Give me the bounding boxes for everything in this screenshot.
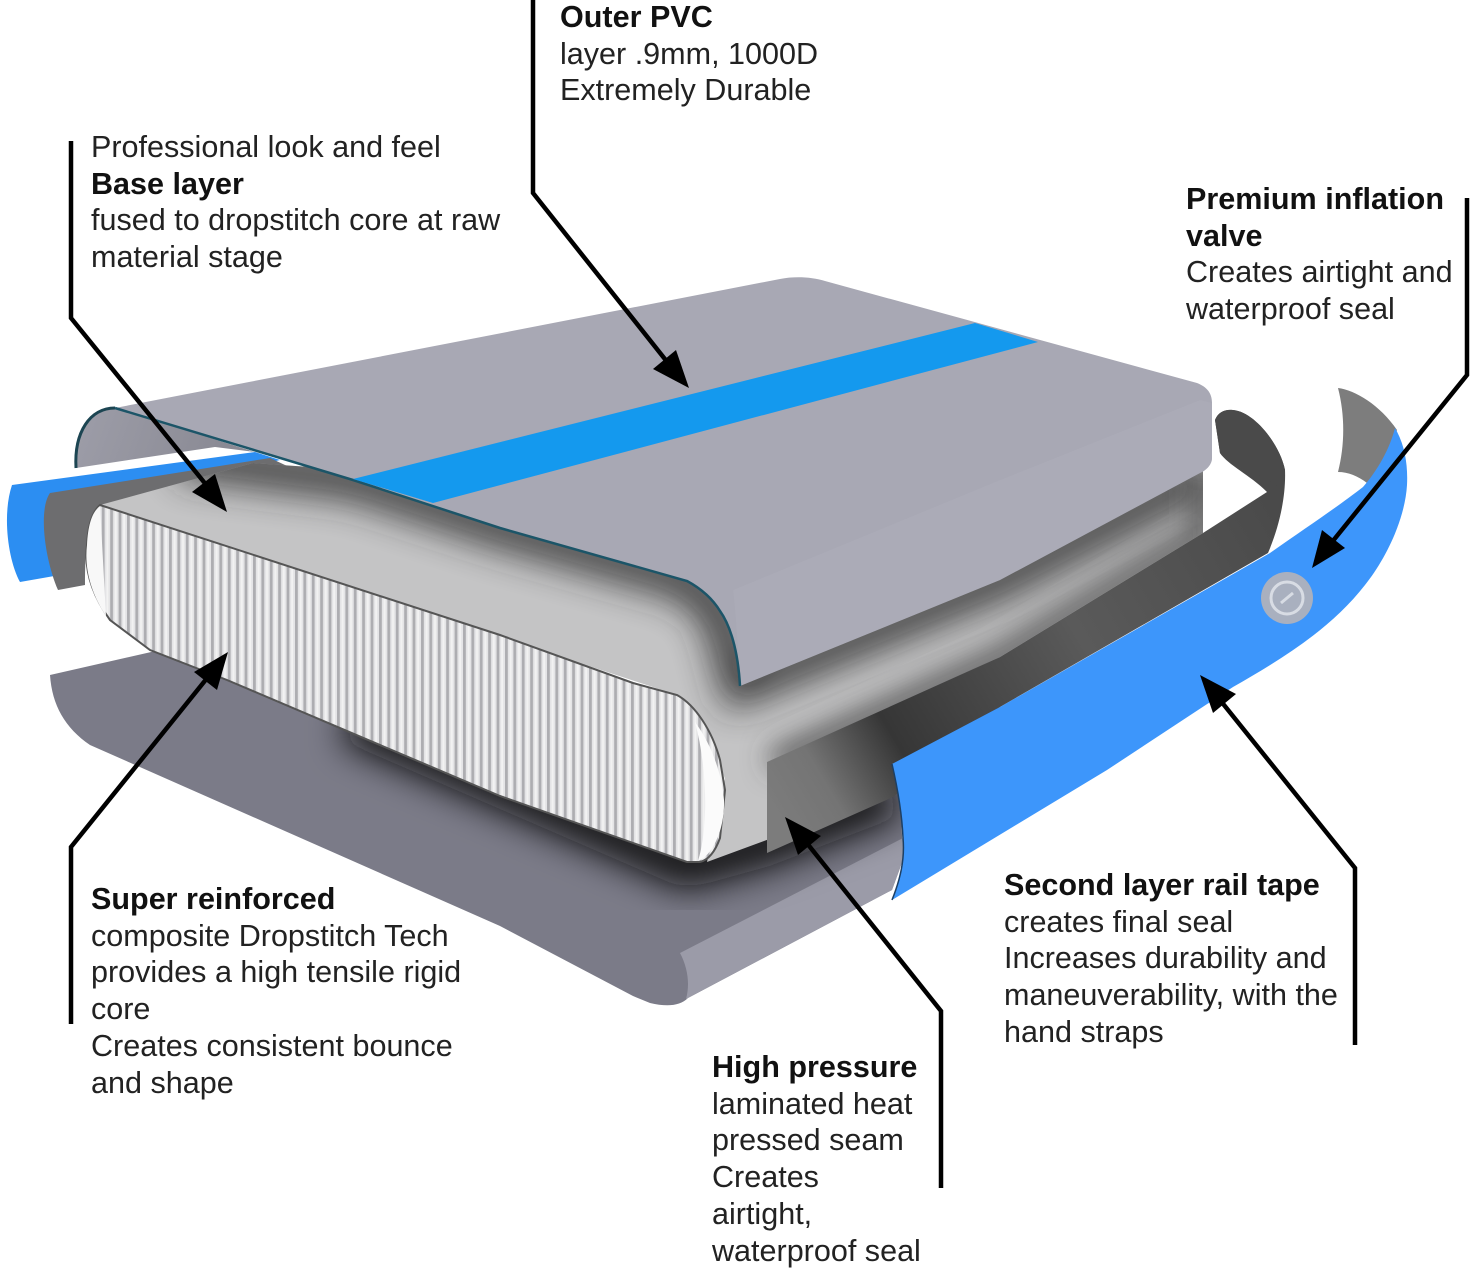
gray flap top right — [1338, 388, 1397, 483]
text: high pressure: Creates — [712, 1160, 819, 1194]
arrow: second layer rail tape — [1200, 675, 1355, 1045]
text: high pressure: pressed seam — [712, 1123, 904, 1157]
text: base layer: Base layer — [91, 167, 244, 201]
text: second layer rail tape: hand straps — [1004, 1015, 1164, 1049]
text: premium inflation valve — [1186, 182, 1453, 326]
arrow: dropstitch core — [71, 652, 228, 1024]
text: base layer: fused to dropstitch core at raw — [91, 203, 500, 237]
text: second layer rail tape: Second layer rail tape — [1004, 868, 1320, 902]
top skin sheet — [115, 277, 1212, 686]
text: second layer rail tape: Increases durability and — [1004, 941, 1327, 975]
blue stripe on top sheet — [353, 323, 1038, 503]
text: second layer rail tape — [1004, 868, 1338, 1049]
core left white end — [86, 506, 106, 616]
text: premium inflation valve: waterproof seal — [1186, 292, 1395, 326]
blue rail tape left end — [7, 452, 280, 582]
text: high pressure: laminated heat — [712, 1087, 912, 1121]
dark rail band left end — [44, 458, 300, 590]
text: second layer rail tape: creates final seal — [1004, 905, 1233, 939]
text: high pressure: airtight, — [712, 1197, 812, 1231]
text: premium inflation valve: Creates airtight and — [1186, 255, 1453, 289]
rear left skin curl — [76, 408, 255, 468]
text: outer PVC — [560, 0, 818, 107]
text: super reinforced: composite Dropstitch Tech — [91, 919, 449, 953]
icon: inflation valve — [1261, 572, 1313, 624]
core right white end — [695, 722, 724, 861]
lower skin sheet — [50, 650, 903, 1005]
text: base layer: material stage — [91, 240, 283, 274]
text: second layer rail tape: maneuverability, with the — [1004, 978, 1338, 1012]
text: super reinforced: provides a high tensile rigid — [91, 955, 461, 989]
arrow: premium inflation valve — [1312, 198, 1467, 568]
text: outer PVC: Extremely Durable — [560, 73, 811, 107]
text: premium inflation valve: Premium inflation — [1186, 182, 1444, 216]
core body and base layer — [100, 458, 1203, 862]
text: high pressure: High pressure — [712, 1050, 917, 1084]
text: base layer: Professional look and feel — [91, 130, 441, 164]
text: super reinforced: and shape — [91, 1066, 234, 1100]
text: super reinforced: Super reinforced — [91, 882, 335, 916]
text: super reinforced — [91, 882, 461, 1100]
arrow: high pressure seam — [785, 817, 941, 1188]
text: high pressure: waterproof seal — [712, 1234, 921, 1268]
blue rail tape right — [892, 428, 1407, 900]
text: outer PVC: layer .9mm, 1000D — [560, 37, 818, 71]
dark rail band right — [767, 410, 1285, 853]
arrow: base layer — [71, 141, 227, 512]
text: high pressure — [712, 1050, 921, 1268]
text: outer PVC: Outer PVC — [560, 0, 713, 34]
text: premium inflation valve: valve — [1186, 219, 1262, 253]
text: super reinforced: Creates consistent bounce — [91, 1029, 453, 1063]
arrow: outer PVC — [533, 0, 689, 388]
text: base layer — [91, 130, 500, 274]
dropstitch core — [86, 505, 725, 862]
text: super reinforced: core — [91, 992, 150, 1026]
